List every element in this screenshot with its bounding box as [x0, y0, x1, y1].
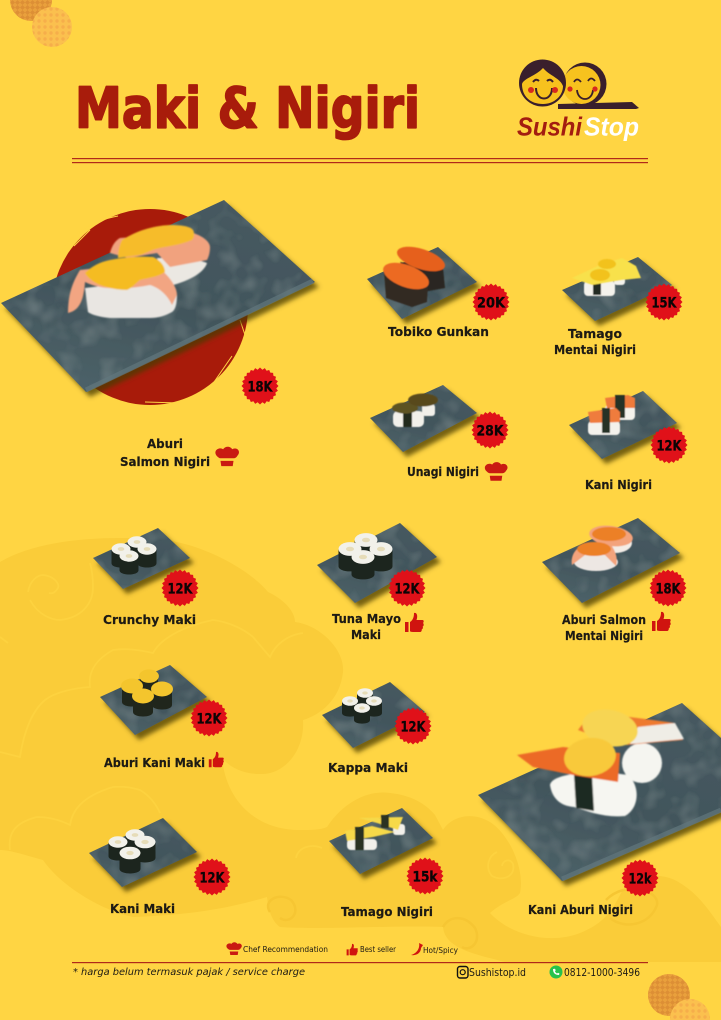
item: Crunchy Maki	[93, 528, 190, 589]
price: 12K	[190, 700, 228, 736]
price: 15K	[646, 284, 682, 320]
label: Kani Nigiri: Kani Nigiri	[585, 477, 652, 492]
label: Kani Aburi Nigiri: Kani Aburi Nigiri	[528, 902, 633, 917]
price: 12K: 12K	[196, 712, 222, 728]
whatsapp number: 0812-1000-3496	[564, 967, 640, 979]
price: 28K	[472, 412, 508, 448]
price: 12K	[194, 858, 230, 896]
price: 12k: 12k	[628, 872, 652, 888]
label: Tuna Mayo Maki: Maki	[351, 627, 381, 642]
label: Tobiko Gunkan: Tobiko Gunkan	[388, 324, 489, 339]
item: Tamago Mentai Nigiri	[562, 257, 672, 321]
label: Aburi Salmon Mentai Nigiri	[562, 612, 646, 643]
label: Tamago Mentai Nigiri: Tamago	[568, 326, 622, 341]
price: 15K: 15K	[652, 296, 677, 312]
item: Aburi Salmon Mentai Nigiri	[542, 518, 680, 603]
price: 18K	[650, 570, 686, 606]
label: Aburi Salmon Nigiri: Salmon Nigiri	[120, 454, 210, 469]
price: 12K: 12K	[168, 582, 193, 598]
item: Aburi Kani Maki	[100, 665, 207, 735]
item: Unagi Nigiri	[370, 385, 477, 452]
legend: Best seller	[360, 945, 397, 954]
label: Tamago Nigiri: Tamago Nigiri	[341, 904, 433, 919]
title: Maki & Nigiri	[75, 76, 420, 142]
price: 28K: 28K	[476, 424, 505, 440]
legend	[226, 942, 459, 955]
legend: Chef Recommendation	[243, 945, 328, 954]
legend: Hot/Spicy	[423, 946, 459, 955]
label: Tamago Mentai Nigiri: Mentai Nigiri	[554, 342, 636, 357]
chopstick bar	[558, 102, 639, 109]
logo face left	[519, 60, 566, 106]
label: Unagi Nigiri: Unagi Nigiri	[407, 464, 479, 479]
label: Tuna Mayo Maki	[332, 611, 401, 642]
label: Aburi Salmon Nigiri	[120, 436, 210, 469]
logo face right	[562, 62, 606, 106]
icon: thumbs up	[652, 612, 671, 631]
price: 12K: 12K	[656, 438, 682, 454]
price: 12K	[162, 570, 198, 606]
footnote: * harga belum termasuk pajak / service charge	[73, 967, 305, 978]
price: 20K	[472, 284, 510, 320]
item: Aburi Salmon Nigiri	[1, 200, 315, 405]
price: 18K	[242, 368, 278, 404]
label: Aburi Salmon Nigiri: Aburi	[147, 436, 183, 451]
price: 15k: 15k	[412, 870, 438, 886]
icon: thumbs up	[209, 752, 224, 767]
plate edge	[86, 281, 313, 390]
item: Tuna Mayo Maki	[317, 523, 437, 603]
label: Crunchy Maki: Crunchy Maki	[103, 612, 196, 627]
decorative circles bottom right	[648, 974, 710, 1020]
price: 18K: 18K	[656, 582, 681, 598]
price: 15k	[406, 858, 444, 894]
item: Tamago Nigiri	[329, 808, 433, 874]
label: Aburi Salmon Mentai Nigiri: Mentai Nigiri	[565, 628, 643, 643]
item: Tobiko Gunkan	[367, 242, 477, 319]
background clouds	[0, 538, 721, 962]
darker lower cloud layer	[268, 889, 657, 948]
price: 20K: 20K	[477, 296, 506, 312]
label: Aburi Salmon Mentai Nigiri: Aburi Salmon	[562, 612, 646, 627]
whatsapp number	[550, 966, 640, 979]
title divider	[72, 158, 648, 163]
logo: Stop	[584, 112, 639, 142]
logo wordmark: Sushi	[517, 112, 583, 142]
item: Kappa Maki	[322, 682, 425, 748]
slate plate	[1, 200, 315, 392]
price: 12K	[394, 708, 432, 744]
item: Kani Nigiri	[569, 391, 677, 459]
item: Kani Maki	[89, 818, 197, 887]
price: 12k	[622, 860, 658, 896]
decorative circles top left	[10, 0, 72, 47]
brush highlights	[60, 206, 246, 403]
icon: chef hat	[215, 447, 239, 466]
label: Tamago Mentai Nigiri	[554, 326, 636, 357]
label: Kani Maki: Kani Maki	[110, 901, 175, 916]
item: Kani Aburi Nigiri	[478, 703, 721, 881]
label: Kappa Maki: Kappa Maki	[328, 760, 408, 775]
sushi	[68, 225, 210, 318]
label: Tuna Mayo Maki: Tuna Mayo	[332, 611, 401, 626]
label: Aburi Kani Maki: Aburi Kani Maki	[104, 755, 205, 770]
price: 12K: 12K	[400, 720, 426, 736]
logo	[517, 60, 639, 142]
price: 12K	[388, 570, 426, 606]
price: 12K	[650, 426, 688, 464]
price: 18K: 18K	[248, 380, 273, 396]
price: 12K: 12K	[394, 582, 420, 598]
footer rule	[72, 962, 648, 963]
plate edge	[562, 810, 721, 879]
price: 12K: 12K	[200, 870, 225, 886]
icon: thumbs up	[405, 613, 424, 632]
instagram handle: Sushistop.id	[469, 967, 526, 979]
icon: chef hat	[485, 462, 508, 481]
red brush circle	[52, 209, 248, 405]
